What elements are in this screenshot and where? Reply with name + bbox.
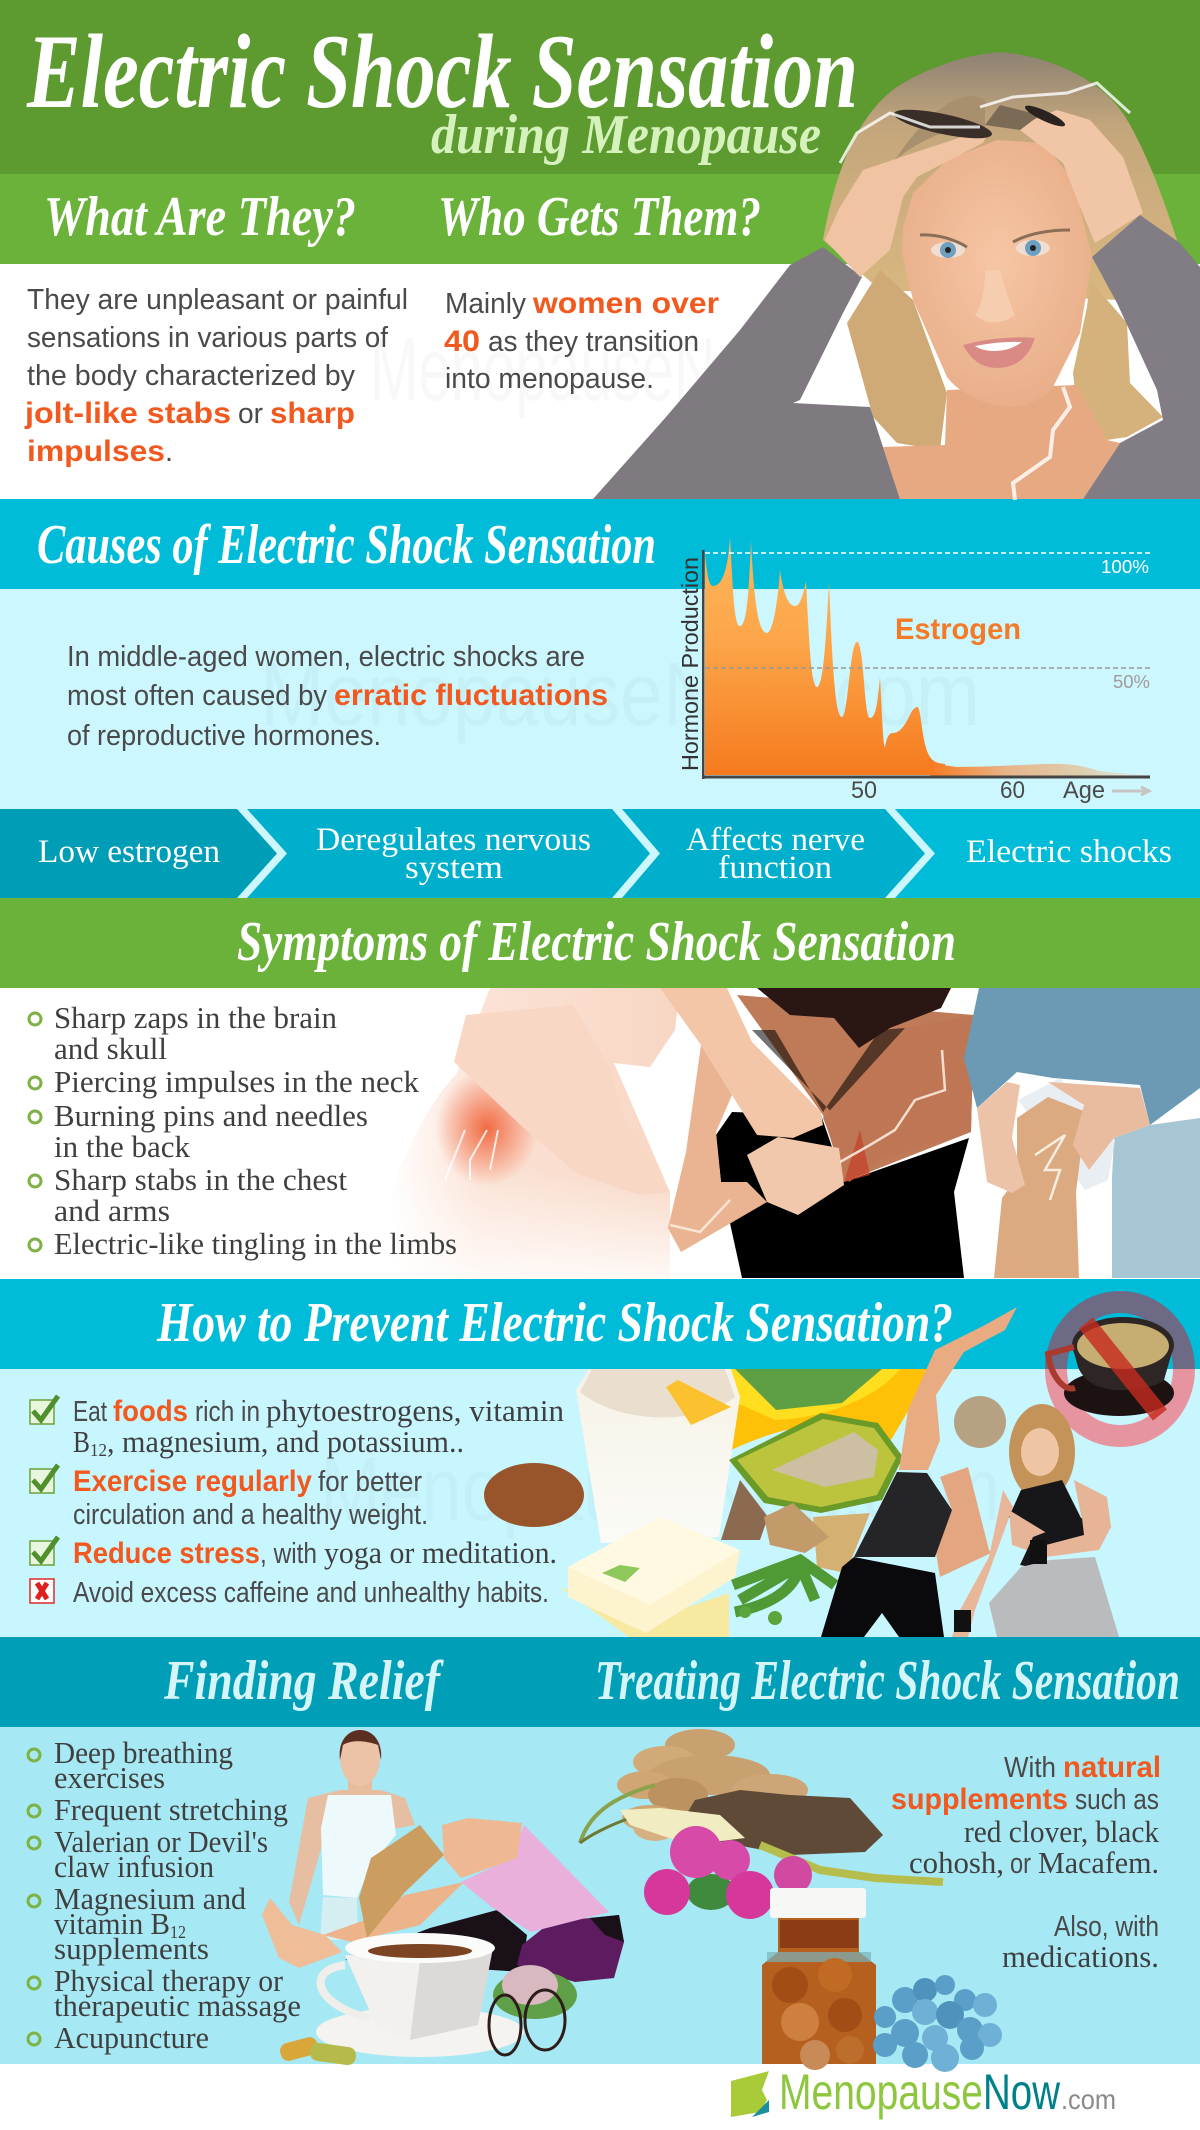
symptoms list: [29, 1000, 457, 1261]
relief list: claw infusion: [54, 1849, 214, 1884]
subtitle: during Menopause: [431, 104, 821, 166]
text: who gets them: as they transition: [488, 326, 699, 358]
symptoms list: Electric-like tingling in the limbs: [54, 1226, 457, 1261]
prevention checklist: B: [73, 1424, 90, 1459]
text: what are they: [24, 284, 408, 468]
logo: Now: [983, 2064, 1061, 2120]
treatment text: natural: [1063, 1751, 1161, 1784]
chart: estrogen production by age: 50%: [1113, 672, 1150, 692]
text: who gets them: 40: [444, 325, 480, 358]
text: what are they: jolt-like stabs: [24, 397, 231, 430]
chevron flow: low estrogen to electric shocks: function: [718, 850, 832, 886]
prevention checklist: Exercise regularly: [73, 1465, 312, 1498]
symptoms list: and arms: [54, 1193, 170, 1228]
text: who gets them: [444, 287, 719, 395]
prevention checklist: phytoestrogens, vitamin: [266, 1393, 564, 1428]
relief list: Frequent stretching: [54, 1792, 288, 1827]
heading: symptoms: Symptoms of Electric Shock Sensation: [237, 911, 956, 973]
prevention checklist: circulation and a healthy weight.: [73, 1499, 428, 1531]
treatment text: Macafem.: [1038, 1845, 1159, 1880]
relief list: Acupuncture: [54, 2020, 209, 2055]
heading: prevention: How to Prevent Electric Shock Sensation?: [156, 1292, 953, 1354]
relief list: Physical therapy or: [54, 1963, 284, 1998]
relief list: vitamin B: [54, 1906, 170, 1941]
icon: no caffeine sign: [1048, 1302, 1184, 1436]
relief panel background: [0, 1727, 1200, 2064]
text: what are they: or: [238, 398, 263, 430]
chevron flow: low estrogen to electric shocks: Electric shocks: [966, 834, 1172, 870]
heading: causes: Causes of Electric Shock Sensation: [37, 514, 656, 576]
chart: estrogen production by age: Estrogen: [895, 613, 1021, 646]
watermarks: [260, 320, 1000, 1540]
chart: estrogen production by age: Age: [1063, 777, 1105, 804]
symptoms list: and skull: [54, 1031, 167, 1066]
photos: herbal supplements and medication: [580, 1729, 1002, 2072]
prevention checklist: yoga or meditation.: [324, 1535, 557, 1570]
chevron flow: low estrogen to electric shocks: Deregulates nervous: [316, 822, 591, 858]
prevention checklist: rich in: [195, 1396, 260, 1428]
symptoms list: Sharp stabs in the chest: [54, 1162, 347, 1197]
treatment text: such as: [1075, 1784, 1159, 1816]
treatment text: or: [1010, 1848, 1031, 1880]
symptoms list: Piercing impulses in the neck: [54, 1064, 419, 1099]
text: causes: most often caused by: [67, 680, 327, 712]
treatment text: medications.: [1002, 1939, 1159, 1974]
title: Electric Shock Sensation: [26, 13, 858, 130]
text: causes: In middle-aged women, electric shocks are: [67, 641, 585, 673]
treatment text: supplements: [891, 1783, 1068, 1816]
symptoms list: Burning pins and needles: [54, 1098, 368, 1133]
relief band: [0, 1637, 1200, 1727]
text: who gets them: women over: [532, 287, 719, 320]
text: causes: [67, 641, 608, 752]
logo: [731, 2064, 1116, 2120]
logo: Menopause: [779, 2064, 983, 2120]
chart: estrogen production by age: 60: [1000, 777, 1025, 804]
chart: estrogen production by age: [677, 537, 1150, 804]
symptoms list: Sharp zaps in the brain: [54, 1000, 337, 1035]
symptoms band: [0, 898, 1200, 988]
prevention checklist: 12: [90, 1440, 107, 1460]
prevention checklist: , with: [260, 1538, 317, 1570]
chevron flow: low estrogen to electric shocks: system: [405, 850, 503, 886]
relief list: supplements: [54, 1931, 209, 1966]
chart: estrogen production by age: 100%: [1101, 557, 1149, 577]
treatment text: cohosh,: [909, 1845, 1004, 1880]
header band: [0, 0, 1200, 174]
heading: finding relief: Finding Relief: [163, 1650, 444, 1712]
chevron flow: low estrogen to electric shocks: [0, 809, 1200, 898]
chart: estrogen production by age: Hormone Production: [677, 557, 703, 771]
treatment text: Also, with: [1054, 1911, 1159, 1943]
text: what are they: .: [165, 436, 173, 468]
prevention checklist: Avoid excess caffeine and unhealthy habits.: [73, 1577, 549, 1609]
photos: neck, arm and knee pain: [390, 988, 1200, 1279]
photo: woman holding her head: [593, 52, 1200, 500]
photos: healthy foods: [484, 1307, 1119, 1637]
watermarks: MenopauseNow: [370, 320, 791, 420]
prevention checklist: , magnesium, and potassium..: [107, 1424, 464, 1459]
symptoms list: in the back: [54, 1129, 190, 1164]
text: what are they: the body characterized by: [27, 360, 355, 392]
text: what are they: impulses: [27, 435, 165, 468]
treatment text: red clover, black: [964, 1814, 1159, 1849]
prevention panel background: [0, 1369, 1200, 1637]
text: causes: of reproductive hormones.: [67, 720, 381, 752]
text: what are they: sensations in various parts of: [27, 322, 389, 354]
chevron flow: low estrogen to electric shocks: Low estrogen: [38, 834, 220, 870]
text: who gets them: into menopause.: [445, 363, 654, 395]
relief list: therapeutic massage: [54, 1988, 301, 2023]
causes band: [0, 499, 1200, 589]
logo: .com: [1061, 2084, 1116, 2115]
heading: what are they: What Are They?: [44, 186, 356, 248]
causes panel background: [0, 589, 1200, 809]
text: what are they: They are unpleasant or painful: [27, 284, 408, 316]
relief list: [28, 1735, 301, 2055]
relief list: Valerian or Devil's: [54, 1824, 268, 1859]
text: causes: erratic fluctuations: [334, 679, 608, 712]
text: who gets them: Mainly: [445, 288, 526, 320]
prevention checklist: [30, 1393, 564, 1609]
heading: who gets them: Who Gets Them?: [438, 186, 761, 248]
prevention checklist: Eat: [73, 1396, 107, 1428]
relief list: Deep breathing: [54, 1735, 233, 1770]
watermarks: MenopauseNow.com: [320, 1440, 1000, 1540]
chevron flow: low estrogen to electric shocks: Affects nerve: [686, 822, 865, 858]
chart: estrogen production by age: 50: [851, 777, 877, 804]
prevention checklist: foods: [113, 1395, 188, 1428]
text: what are they: sharp: [270, 397, 355, 430]
treatment text: With: [1004, 1752, 1056, 1784]
prevention checklist: Reduce stress: [73, 1537, 260, 1570]
prevention checklist: for better: [318, 1466, 422, 1498]
relief list: exercises: [54, 1760, 165, 1795]
relief list: 12: [170, 1922, 186, 1942]
treatment text: [891, 1751, 1161, 1974]
watermarks: MenopauseNow.com: [260, 645, 980, 745]
relief list: Magnesium and: [54, 1881, 246, 1916]
subheader band: [0, 174, 1200, 264]
prevention band: [0, 1279, 1200, 1369]
photos: yoga women and tea: [262, 1730, 624, 2066]
